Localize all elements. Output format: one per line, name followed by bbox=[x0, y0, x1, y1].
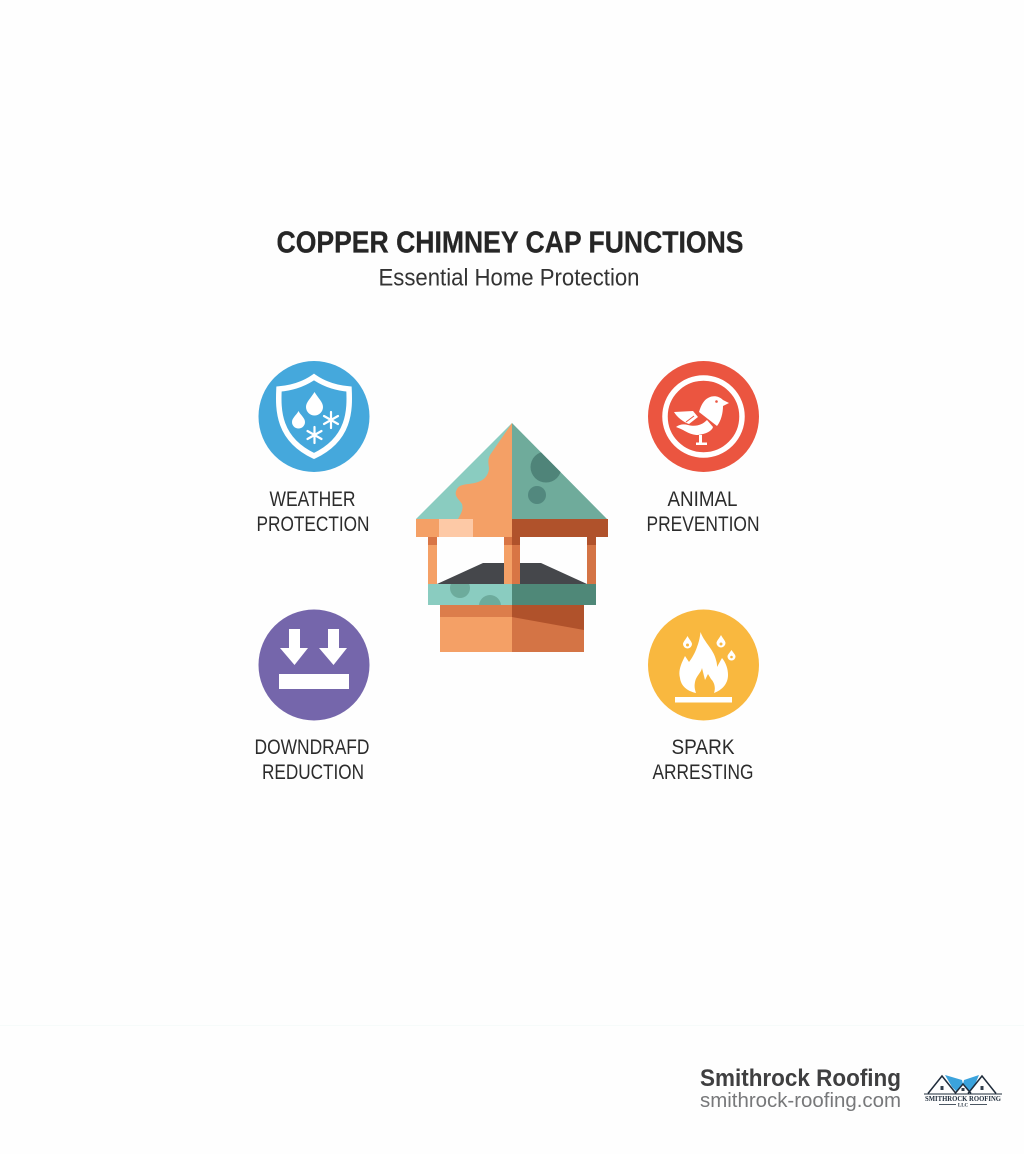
support posts bbox=[428, 537, 596, 584]
label: DOWNDRAFD bbox=[254, 736, 370, 759]
label bbox=[254, 736, 370, 784]
icon: bird in prohibition ring bbox=[648, 361, 759, 472]
icon: shield with rain and snow bbox=[258, 361, 370, 472]
subtitle: Essential Home Protection bbox=[378, 265, 640, 292]
centre post bbox=[504, 537, 520, 584]
function: weather protection bbox=[256, 361, 370, 536]
logo roofs bbox=[924, 1075, 1002, 1094]
title: COPPER CHIMNEY CAP FUNCTIONS bbox=[276, 226, 744, 260]
label: WEATHER bbox=[270, 488, 356, 511]
infographic canvas bbox=[256, 231, 1002, 1111]
label: PROTECTION bbox=[256, 513, 370, 536]
roof bbox=[416, 423, 607, 519]
roof band bbox=[416, 519, 608, 537]
function: animal prevention bbox=[646, 361, 760, 536]
green collar bbox=[428, 584, 596, 605]
function: downdraft reduction bbox=[254, 610, 370, 784]
footer brand name: Smithrock Roofing bbox=[700, 1065, 901, 1092]
icon: down arrows on bar bbox=[258, 610, 370, 720]
label: ANIMAL bbox=[668, 488, 738, 511]
footer website: smithrock-roofing.com bbox=[700, 1090, 901, 1112]
icon: flame with sparks bbox=[648, 610, 759, 720]
label: SPARK bbox=[672, 736, 734, 759]
label bbox=[256, 488, 370, 536]
label: REDUCTION bbox=[262, 761, 364, 784]
chimney stack bbox=[440, 605, 584, 652]
dark inner cone bbox=[437, 563, 587, 584]
label: ARRESTING bbox=[652, 761, 754, 784]
illustration: copper chimney cap bbox=[416, 423, 608, 652]
logo LLC: LLC bbox=[958, 1104, 969, 1108]
label: PREVENTION bbox=[646, 513, 760, 536]
label bbox=[652, 736, 754, 784]
logo: Smithrock Roofing LLC bbox=[924, 1075, 1002, 1108]
logo wordmark: SMITHROCK ROOFING bbox=[925, 1094, 1001, 1103]
label bbox=[646, 488, 760, 536]
function: spark arresting bbox=[648, 610, 759, 784]
